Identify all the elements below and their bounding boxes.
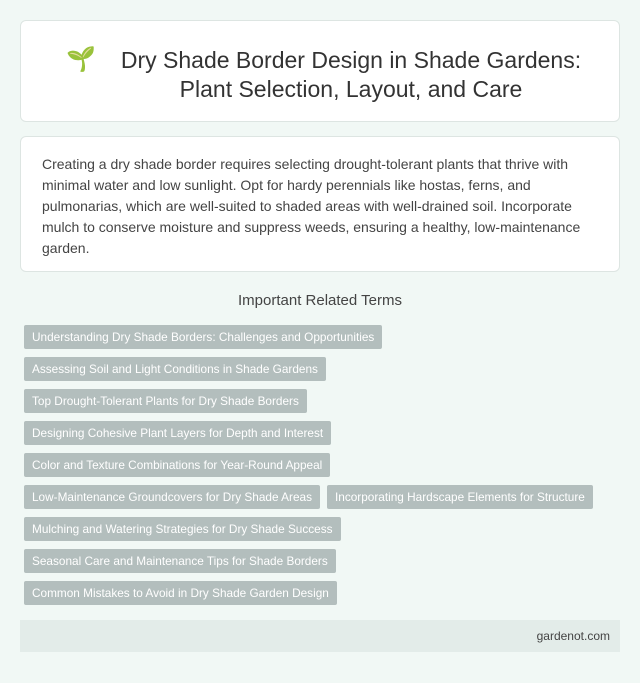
tags list: Designing Cohesive Plant Layers for Depth and Interest	[32, 426, 323, 440]
tags list: Top Drought-Tolerant Plants for Dry Shade Borders	[32, 394, 299, 408]
title: Dry Shade Border Design in Shade Gardens: Plant Selection, Layout, and Care	[121, 47, 581, 102]
icon: seedling: 🌱	[66, 46, 96, 73]
intro text panel: Creating a dry shade border requires selecting drought-tolerant plants that thrive with minimal water and low sunlight. Opt for hardy perennials like hostas, ferns, and pulmonarias, which are well-suited to shaded areas with well-drained soil. Incorporate mulch to conserve moisture and suppress weeds, ensuring a healthy, low-maintenance garden.	[42, 156, 580, 256]
tags list: Low-Maintenance Groundcovers for Dry Shade Areas	[32, 490, 312, 504]
tags list: Common Mistakes to Avoid in Dry Shade Garden Design	[32, 586, 329, 600]
footer: gardenot.com	[537, 629, 610, 643]
tags list: Mulching and Watering Strategies for Dry Shade Success	[32, 522, 333, 536]
tags list: Understanding Dry Shade Borders: Challenges and Opportunities	[32, 330, 374, 344]
title panel	[20, 20, 620, 122]
tags list: Assessing Soil and Light Conditions in Shade Gardens	[32, 362, 318, 376]
tags list: Seasonal Care and Maintenance Tips for Shade Borders	[32, 554, 328, 568]
heading: related terms: Important Related Terms	[238, 292, 402, 309]
footer	[20, 620, 620, 652]
tags list: Incorporating Hardscape Elements for Structure	[335, 490, 585, 504]
intro text panel	[20, 136, 620, 272]
tags list: Color and Texture Combinations for Year-Round Appeal	[32, 458, 322, 472]
